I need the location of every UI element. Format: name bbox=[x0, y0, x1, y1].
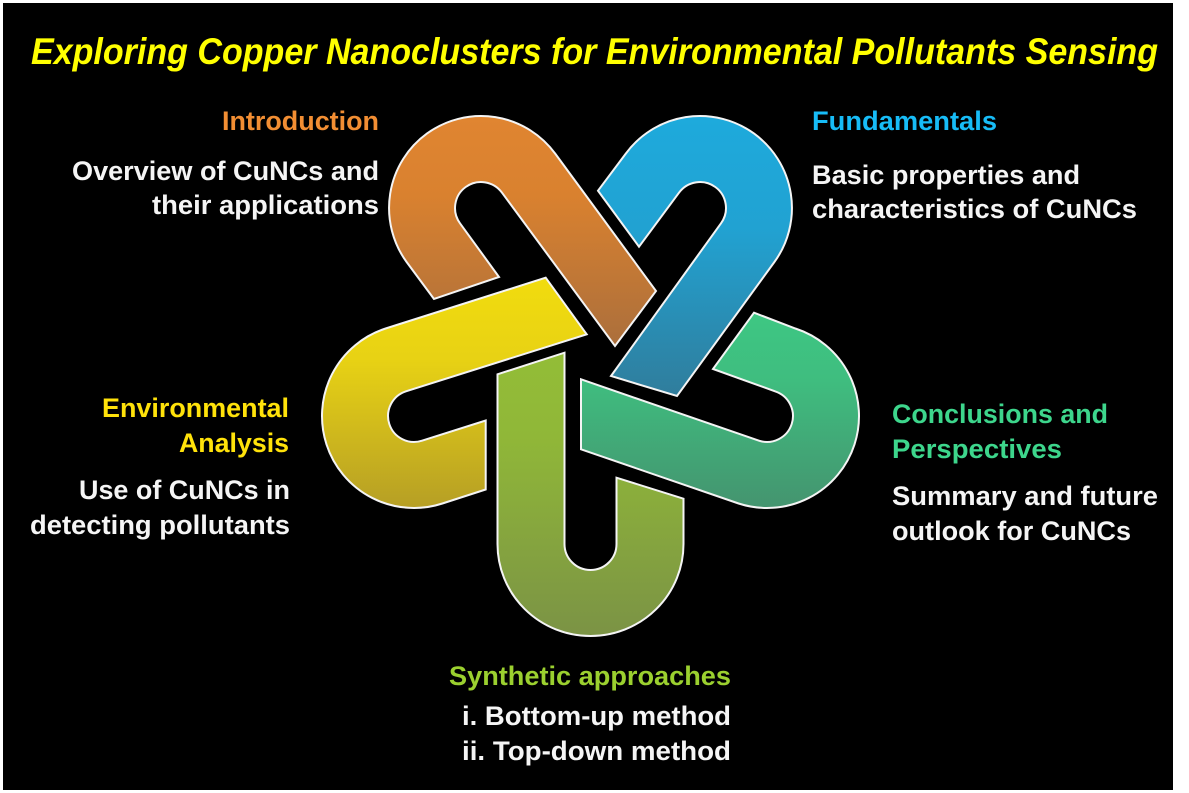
text block: synthetic approaches bbox=[449, 661, 731, 766]
heading: fundamentals: Fundamentals bbox=[812, 106, 997, 136]
text block: conclusions and perspectives bbox=[892, 399, 1158, 546]
body: introduction: Overview of CuNCs and bbox=[72, 156, 379, 186]
body: introduction: their applications bbox=[152, 190, 379, 220]
text block: environmental analysis bbox=[30, 393, 290, 540]
body: introduction bbox=[72, 156, 379, 220]
body: conclusions and perspectives: outlook for CuNCs bbox=[892, 516, 1131, 546]
heading: environmental analysis bbox=[102, 393, 289, 458]
body: environmental analysis: detecting pollutants bbox=[30, 510, 290, 540]
strand: yellow (environmental analysis) bbox=[322, 278, 587, 508]
diagram: interlocking five-strand knot bbox=[322, 116, 859, 636]
body: conclusions and perspectives: Summary and future bbox=[892, 481, 1158, 511]
body: environmental analysis bbox=[30, 475, 290, 540]
strand: lime (synthetic approaches) bbox=[498, 353, 684, 636]
body: synthetic approaches: i. Bottom-up method bbox=[462, 701, 731, 731]
text block: introduction bbox=[72, 106, 379, 220]
body: conclusions and perspectives bbox=[892, 481, 1158, 546]
strand: green (conclusions) bbox=[581, 313, 859, 508]
heading: environmental analysis: Analysis bbox=[179, 428, 289, 458]
text block: fundamentals bbox=[812, 106, 1137, 224]
heading: conclusions and perspectives bbox=[892, 399, 1108, 464]
body: synthetic approaches: ii. Top-down method bbox=[462, 736, 731, 766]
heading: conclusions and perspectives: Perspectives bbox=[892, 434, 1062, 464]
heading: environmental analysis: Environmental bbox=[102, 393, 289, 423]
strand: blue (fundamentals) bbox=[598, 116, 792, 396]
body: fundamentals bbox=[812, 160, 1137, 224]
strand: orange (introduction) bbox=[389, 116, 656, 346]
heading: synthetic approaches: Synthetic approaches bbox=[449, 661, 731, 691]
body: fundamentals: characteristics of CuNCs bbox=[812, 194, 1137, 224]
body: environmental analysis: Use of CuNCs in bbox=[79, 475, 290, 505]
heading: introduction: Introduction bbox=[222, 106, 379, 136]
body: fundamentals: Basic properties and bbox=[812, 160, 1080, 190]
heading: conclusions and perspectives: Conclusions and bbox=[892, 399, 1108, 429]
body: synthetic approaches bbox=[462, 701, 731, 766]
